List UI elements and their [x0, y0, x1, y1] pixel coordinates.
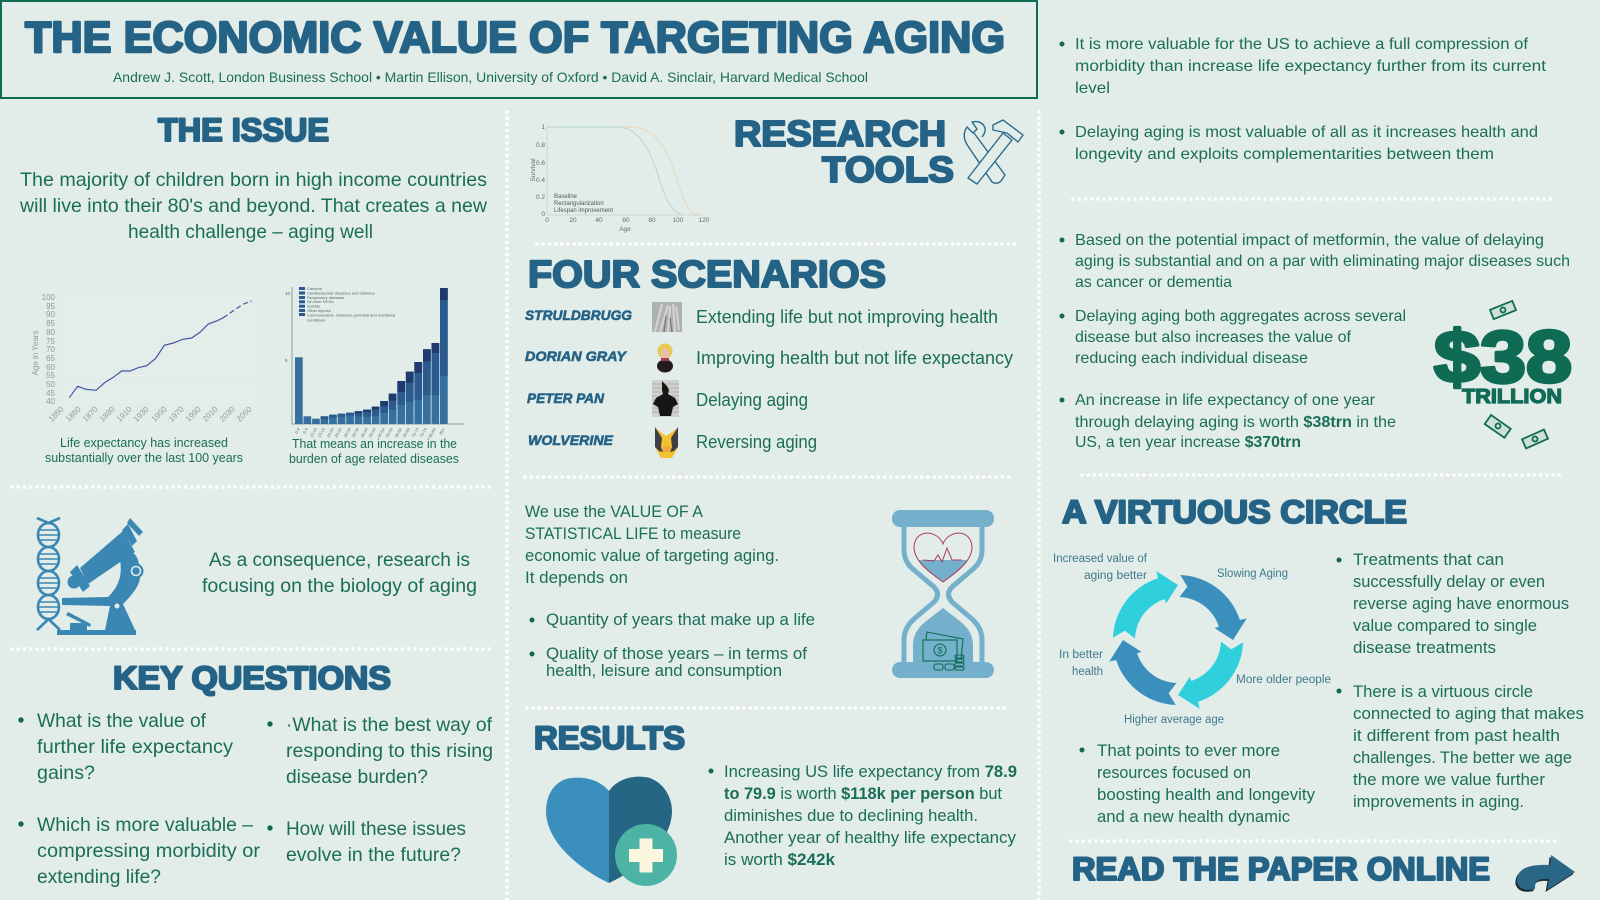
survival chart: 0.2 [536, 194, 545, 201]
bar chart: disease burden by age: Respiratory diseases [307, 295, 344, 300]
survival chart: 1 [541, 124, 545, 131]
text block: treatments and virtuous circle: Treatments that can [1353, 551, 1504, 569]
line chart: life expectancy: 80 [46, 328, 56, 337]
line chart: life expectancy: 1970 [167, 404, 186, 424]
line chart: life expectancy: 50 [46, 380, 56, 389]
results text: to 79.9 is worth $118k per person but [724, 785, 1002, 803]
text block: treatments and virtuous circle: disease treatments [1353, 639, 1496, 657]
bar chart: disease burden by age: 0-4 [294, 426, 301, 435]
bar chart: disease burden by age: 10 [285, 291, 291, 296]
line chart: life expectancy: 1910 [115, 404, 134, 424]
scenario: Peter Pan [527, 380, 808, 417]
scenario: Dorian Gray: DORIAN GRAY [525, 348, 628, 364]
line chart: life expectancy: 1880 [98, 404, 117, 424]
scenario: Struldbrugg [525, 302, 998, 332]
diagram: virtuous circle: In better [1059, 649, 1103, 661]
bar chart: disease burden by age: 35-39 [350, 426, 360, 438]
panel: key questions [18, 660, 493, 888]
line chart: life expectancy [31, 293, 256, 424]
diagram: virtuous circle: Higher average age [1124, 714, 1224, 726]
icon: hourglass: $ [937, 646, 943, 656]
survival chart: 120 [699, 217, 710, 224]
bar chart: disease burden by age: 80-84 [427, 426, 437, 438]
diagram: virtuous circle: Slowing Aging [1217, 568, 1288, 580]
issue paragraph: will live into their 80's and beyond. That creates a new [19, 195, 488, 217]
survival chart: 0.6 [536, 160, 545, 167]
survival chart: Baseline [554, 194, 578, 200]
line chart: life expectancy: 85 [46, 319, 56, 328]
results text: is worth $242k [724, 851, 836, 869]
diagram: virtuous circle: More older people [1236, 674, 1331, 686]
caption: disease burden [289, 437, 459, 466]
bar chart: disease burden by age: 5-9 [302, 426, 309, 435]
questions list: What is the value of [37, 710, 207, 732]
bar chart: disease burden by age: 60-64 [393, 426, 403, 438]
bar chart: disease burden by age: 85+ [438, 426, 446, 435]
text block: value of a statistical life [525, 503, 815, 680]
bar chart: disease burden by age: 5 [285, 358, 288, 363]
text block: new health dynamic: resources focused on [1097, 764, 1251, 782]
scenario: Struldbrugg: Extending life but not improving health [696, 307, 998, 327]
bar chart: disease burden by age: Cardiovascular diseases and diabetes [307, 290, 375, 296]
line chart: life expectancy: 2030 [218, 404, 237, 424]
text block: treatments and virtuous circle: improvements in aging. [1353, 793, 1524, 811]
heading: the issue: THE ISSUE [158, 112, 329, 148]
heading: four scenarios: FOUR SCENARIOS [528, 254, 886, 296]
diagram: virtuous circle [1053, 553, 1331, 726]
authors: Andrew J. Scott, London Business School • Martin Ellison, University of Oxford • David A. Sinclair, Harvard Medical School [113, 69, 868, 85]
caption: disease burden: burden of age related diseases [289, 452, 459, 466]
scenario: Peter Pan: PETER PAN [527, 390, 605, 406]
line chart: life expectancy: 1930 [132, 404, 151, 424]
text block: treatments and virtuous circle: connected to aging that makes [1353, 705, 1584, 723]
text block: treatments and virtuous circle: challenges. The better we age [1353, 749, 1572, 767]
line chart: life expectancy: 45 [46, 389, 56, 398]
text block: metformin and value of delay: aging is substantial and on a par with eliminating major diseases such [1075, 253, 1570, 270]
text block: compression versus delay: It is more valuable for the US to achieve a full compression of [1075, 36, 1529, 53]
bar chart: disease burden by age: 30-34 [342, 426, 352, 438]
scenario: Peter Pan: Delaying aging [696, 390, 808, 410]
text block: metformin and value of delay: Based on the potential impact of metformin, the value of delaying [1075, 232, 1544, 249]
questions list [18, 710, 493, 888]
bar chart: disease burden by age [285, 286, 464, 438]
caption: life expectancy: substantially over the last 100 years [45, 451, 243, 465]
bar chart: disease burden by age: 65-69 [401, 426, 411, 438]
survival chart: Survival [530, 158, 537, 182]
line chart: life expectancy: 55 [46, 371, 56, 380]
text: research focus: focusing on the biology of aging [202, 576, 477, 597]
panel: the issue [19, 112, 488, 243]
text block: metformin and value of delay: Delaying aging both aggregates across several [1075, 308, 1406, 325]
line chart: life expectancy: 95 [46, 302, 56, 311]
text block: treatments and virtuous circle: it different from past health [1353, 727, 1560, 745]
line chart: life expectancy: 65 [46, 354, 56, 363]
bar chart: disease burden by age: 25-29 [333, 426, 343, 438]
text block: treatments and virtuous circle [1336, 551, 1584, 811]
bar chart: disease burden by age: 15-19 [316, 426, 326, 438]
text block: metformin and value of delay: as cancer or dementia [1075, 274, 1232, 291]
text block: compression versus delay: Delaying aging is most valuable of all as it increases health and [1075, 124, 1538, 141]
text block: value of a statistical life: Quality of those years – in terms of [546, 645, 807, 663]
text block: value of a statistical life: health, leisure and consumption [546, 662, 782, 680]
text block: metformin and value of delay: disease but also increases the value of [1075, 329, 1352, 346]
icon: heart with plus [546, 777, 677, 886]
issue paragraph: health challenge – aging well [128, 221, 373, 243]
text block: compression versus delay: longevity and exploits complementarities between them [1075, 146, 1494, 163]
questions list: evolve in the future? [286, 844, 461, 866]
scenario: Struldbrugg: STRULDBRUGG [525, 307, 632, 323]
results text [708, 763, 1017, 869]
questions list: extending life? [37, 866, 161, 888]
survival chart: 60 [622, 217, 630, 224]
survival chart [530, 124, 710, 233]
scenario: Wolverine: Reversing aging [696, 432, 817, 452]
text block: new health dynamic [1080, 742, 1316, 826]
questions list: How will these issues [286, 818, 466, 840]
text block: treatments and virtuous circle: There is a virtuous circle [1353, 683, 1533, 701]
results text: Increasing US life expectancy from 78.9 [724, 763, 1017, 781]
text block: metformin and value of delay: reducing each individual disease [1075, 350, 1308, 367]
scenario: Wolverine [528, 427, 817, 458]
callout: $38 trillion: TRILLION [1462, 386, 1562, 408]
line chart: life expectancy: 100 [42, 293, 56, 302]
line chart: life expectancy: 2050 [235, 404, 254, 424]
survival chart: 80 [648, 217, 656, 224]
text block: value of a statistical life: It depends on [525, 569, 628, 587]
issue paragraph: The majority of children born in high income countries [20, 169, 487, 191]
bar chart: disease burden by age: 20-24 [325, 426, 335, 438]
text block: metformin and value of delay: US, a ten year increase $370trn [1075, 434, 1301, 451]
text block: metformin and value of delay [1060, 232, 1570, 451]
caption: life expectancy: Life expectancy has increased [60, 436, 228, 450]
caption: disease burden: That means an increase in the [292, 437, 457, 451]
text block: treatments and virtuous circle: successfully delay or even [1353, 573, 1545, 591]
text block: metformin and value of delay: through delaying aging is worth $38trn in the [1075, 414, 1396, 431]
bar chart: disease burden by age: 55-59 [384, 426, 394, 438]
callout: $38 trillion [1434, 301, 1572, 448]
text: research focus: As a consequence, research is [209, 550, 470, 571]
survival chart: 100 [673, 217, 684, 224]
heading: research tools: TOOLS [822, 149, 954, 190]
icon: arrow [1515, 855, 1575, 892]
text block: new health dynamic: That points to ever more [1097, 742, 1280, 760]
text block: treatments and virtuous circle: the more we value further [1353, 771, 1546, 789]
heading: a virtuous circle: A VIRTUOUS CIRCLE [1062, 494, 1407, 530]
text block: treatments and virtuous circle: reverse aging have enormous [1353, 595, 1569, 613]
survival chart: 0 [545, 217, 549, 224]
line chart: life expectancy: 1870 [81, 404, 100, 424]
text block: new health dynamic: boosting health and longevity [1097, 786, 1316, 804]
text block: value of a statistical life: We use the VALUE OF A [525, 503, 703, 521]
questions list: Which is more valuable – [37, 814, 253, 836]
line chart: life expectancy: 60 [46, 363, 56, 372]
survival chart: 40 [595, 217, 603, 224]
questions list: ·What is the best way of [286, 714, 493, 736]
text block: value of a statistical life: economic value of targeting aging. [525, 547, 779, 565]
bar chart: disease burden by age: 75-79 [418, 426, 428, 438]
survival chart: 0.4 [536, 177, 545, 184]
questions list: compressing morbidity or [37, 840, 261, 862]
results text: Another year of healthy life expectancy [724, 829, 1017, 847]
survival chart: Rectangularization [554, 201, 604, 207]
line chart: life expectancy: 1990 [184, 404, 203, 424]
survival chart: Lifespan improvement [554, 208, 613, 214]
survival chart: 0 [541, 211, 545, 218]
heading: research tools [734, 113, 954, 190]
bar chart: disease burden by age: 50-54 [376, 426, 386, 438]
results text: diminishes due to declining health. [724, 807, 978, 825]
text block: new health dynamic: and a new health dynamic [1097, 808, 1290, 826]
scenario: Dorian Gray: Improving health but not life expectancy [696, 348, 1013, 368]
text: research focus [202, 550, 477, 597]
bar chart: disease burden by age: conditions [307, 318, 325, 322]
line chart: life expectancy: 1850 [47, 404, 66, 424]
diagram: virtuous circle: Increased value of [1053, 553, 1148, 565]
line chart: life expectancy: 90 [46, 310, 56, 319]
questions list: responding to this rising [286, 740, 493, 762]
bar chart: disease burden by age: 70-74 [410, 426, 420, 438]
issue paragraph [19, 169, 488, 243]
caption: life expectancy [45, 436, 243, 465]
bar chart: disease burden by age: 10-14 [308, 426, 318, 438]
bar chart: disease burden by age: Suicide [307, 304, 321, 308]
bar chart: disease burden by age: 45-49 [367, 426, 377, 438]
bar chart: disease burden by age: All other NCDs [307, 299, 333, 304]
header panel [1, 1, 1037, 98]
text block: value of a statistical life: STATISTICAL LIFE to measure [525, 525, 741, 543]
text block: compression versus delay [1060, 36, 1547, 163]
text block: treatments and virtuous circle: value compared to single [1353, 617, 1537, 635]
heading: read the paper online: READ THE PAPER ONLINE [1072, 851, 1490, 887]
icon: DNA and microscope [37, 518, 144, 635]
survival chart: 0.8 [536, 142, 545, 149]
line chart: life expectancy: 40 [46, 397, 56, 406]
scenario: Wolverine: WOLVERINE [528, 432, 614, 448]
icon: hammer and wrench [964, 120, 1023, 184]
heading: research tools: RESEARCH [734, 113, 946, 154]
diagram: virtuous circle: health [1072, 666, 1103, 678]
title: THE ECONOMIC VALUE OF TARGETING AGING [25, 13, 1005, 62]
heading: key questions: KEY QUESTIONS [113, 660, 391, 696]
line chart: life expectancy: 1950 [150, 404, 169, 424]
questions list: gains? [37, 762, 95, 784]
line chart: life expectancy: 2010 [201, 404, 220, 424]
panel: results [534, 720, 1017, 886]
bar chart: disease burden by age: Other injuries [307, 308, 331, 313]
heading: results: RESULTS [534, 720, 685, 756]
questions list: disease burden? [286, 766, 428, 788]
bar chart: disease burden by age: 40-44 [359, 426, 369, 438]
text block: value of a statistical life: Quantity of years that make up a life [546, 611, 815, 629]
survival chart: 20 [569, 217, 577, 224]
line chart: life expectancy: Age in Years [31, 331, 40, 375]
panel: four scenarios [525, 254, 1013, 458]
text block: metformin and value of delay: An increase in life expectancy of one year [1075, 392, 1375, 409]
scenario: Dorian Gray [525, 344, 1013, 372]
line chart: life expectancy: 75 [46, 337, 56, 346]
callout: $38 trillion: $38 [1434, 317, 1572, 398]
line chart: life expectancy: 70 [46, 345, 56, 354]
survival chart: Age [619, 226, 631, 233]
bar chart: disease burden by age: Cancers [307, 286, 322, 291]
bar chart: disease burden by age: Communicable, maternal, perinatal and nutritional [307, 312, 395, 318]
line chart: life expectancy: 1860 [64, 404, 83, 424]
questions list: further life expectancy [37, 736, 233, 758]
text block: compression versus delay: morbidity than increase life expectancy further from its current [1075, 58, 1547, 75]
diagram: virtuous circle: aging better [1084, 570, 1147, 582]
icon: hourglass [892, 510, 994, 678]
text block: compression versus delay: level [1075, 80, 1110, 97]
